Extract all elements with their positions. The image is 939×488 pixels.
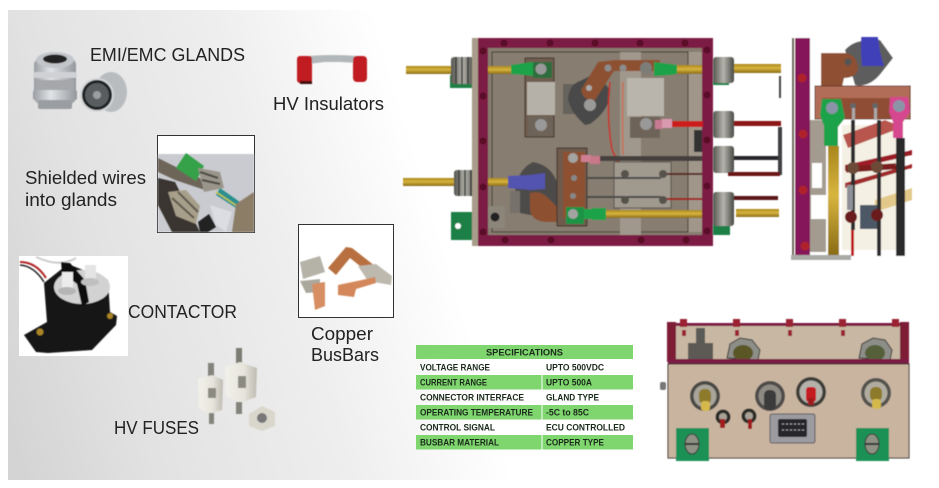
green mounts	[676, 428, 709, 461]
image: copper busbars photo	[298, 224, 394, 318]
image: contactor photo	[19, 256, 128, 356]
label: Copper BusBars	[311, 324, 379, 365]
row: control signal	[420, 422, 625, 432]
diagram: right side glands with leads	[713, 57, 782, 235]
inner floor	[488, 48, 702, 235]
row: control signal: CONTROL SIGNAL	[420, 422, 495, 432]
row: connector interface: CONNECTOR INTERFACE	[420, 392, 524, 402]
frame bolts	[480, 40, 710, 244]
busbar block	[557, 148, 606, 226]
rear connector	[688, 328, 713, 362]
icon: EMI/EMC glands	[33, 52, 127, 112]
row: busbar material: BUSBAR MATERIAL	[420, 436, 499, 448]
icon: HV fuses	[198, 348, 275, 431]
label: Copper BusBars: BusBars	[311, 345, 379, 365]
table: specifications: SPECIFICATIONS	[486, 346, 563, 358]
top lip	[668, 359, 909, 364]
top right fuse	[627, 78, 703, 138]
relay parts	[846, 163, 896, 173]
front glands	[690, 381, 720, 411]
diagram: top view of enclosure	[403, 38, 713, 246]
label: HV FUSES: HV FUSES	[114, 418, 199, 438]
row: operating temperature: -5C to 85C	[546, 406, 589, 418]
row: voltage range	[420, 362, 604, 372]
rear panel	[668, 323, 908, 362]
maroon frame	[478, 38, 713, 246]
small mount	[488, 206, 505, 228]
row: operating temperature	[416, 405, 633, 420]
top cables	[488, 62, 702, 76]
right wall details	[694, 130, 702, 152]
label: Shielded wires into glands: Shielded wires	[25, 168, 146, 188]
row: busbar material: COPPER TYPE	[546, 436, 604, 448]
contactor and purple lug	[845, 40, 893, 85]
background panel	[8, 10, 508, 480]
label: Shielded wires into glands	[25, 168, 146, 210]
table: specifications	[416, 345, 633, 450]
icon: HV insulators	[297, 55, 367, 84]
heading: EMI/EMC GLANDS: EMI/EMC GLANDS	[90, 45, 245, 65]
bottom contactor	[488, 162, 585, 222]
small glands	[716, 410, 730, 428]
outer strip	[472, 38, 478, 246]
row: voltage range: VOLTAGE RANGE	[420, 362, 490, 372]
row: current range: CURRENT RANGE	[420, 376, 487, 388]
thin cables	[850, 103, 856, 109]
maroon wall	[795, 38, 810, 255]
label: HV Insulators: HV Insulators	[273, 94, 384, 114]
image: shielded wires photo	[158, 136, 254, 232]
lower cables and relay	[586, 156, 702, 218]
pink lug	[889, 97, 910, 138]
top left fuse	[525, 58, 555, 137]
signal connector	[770, 414, 815, 443]
row: voltage range: UPTO 500VDC	[546, 362, 604, 372]
rear glands	[727, 338, 760, 361]
left gland bottom	[403, 170, 476, 196]
row: control signal: ECU CONTROLLED	[546, 422, 625, 432]
label: CONTACTOR: CONTACTOR	[128, 302, 237, 322]
row: operating temperature: OPERATING TEMPERATURE	[420, 406, 533, 418]
green lug and rod	[820, 99, 845, 146]
label: Shielded wires into glands: into glands	[25, 190, 117, 210]
diagram: front view of enclosure	[660, 319, 909, 461]
front face	[668, 364, 909, 458]
left gland top	[406, 57, 474, 88]
background collage	[810, 120, 826, 252]
diagram: side section view	[791, 37, 912, 261]
row: connector interface: GLAND TYPE	[546, 392, 599, 402]
busbar	[815, 86, 910, 119]
row: busbar material	[416, 435, 633, 450]
row: current range: UPTO 500A	[546, 376, 592, 388]
row: current range	[416, 375, 633, 390]
green mount	[451, 212, 473, 240]
contactor top	[563, 60, 660, 170]
row: connector interface	[420, 392, 599, 402]
label: Copper BusBars: Copper	[311, 324, 373, 344]
